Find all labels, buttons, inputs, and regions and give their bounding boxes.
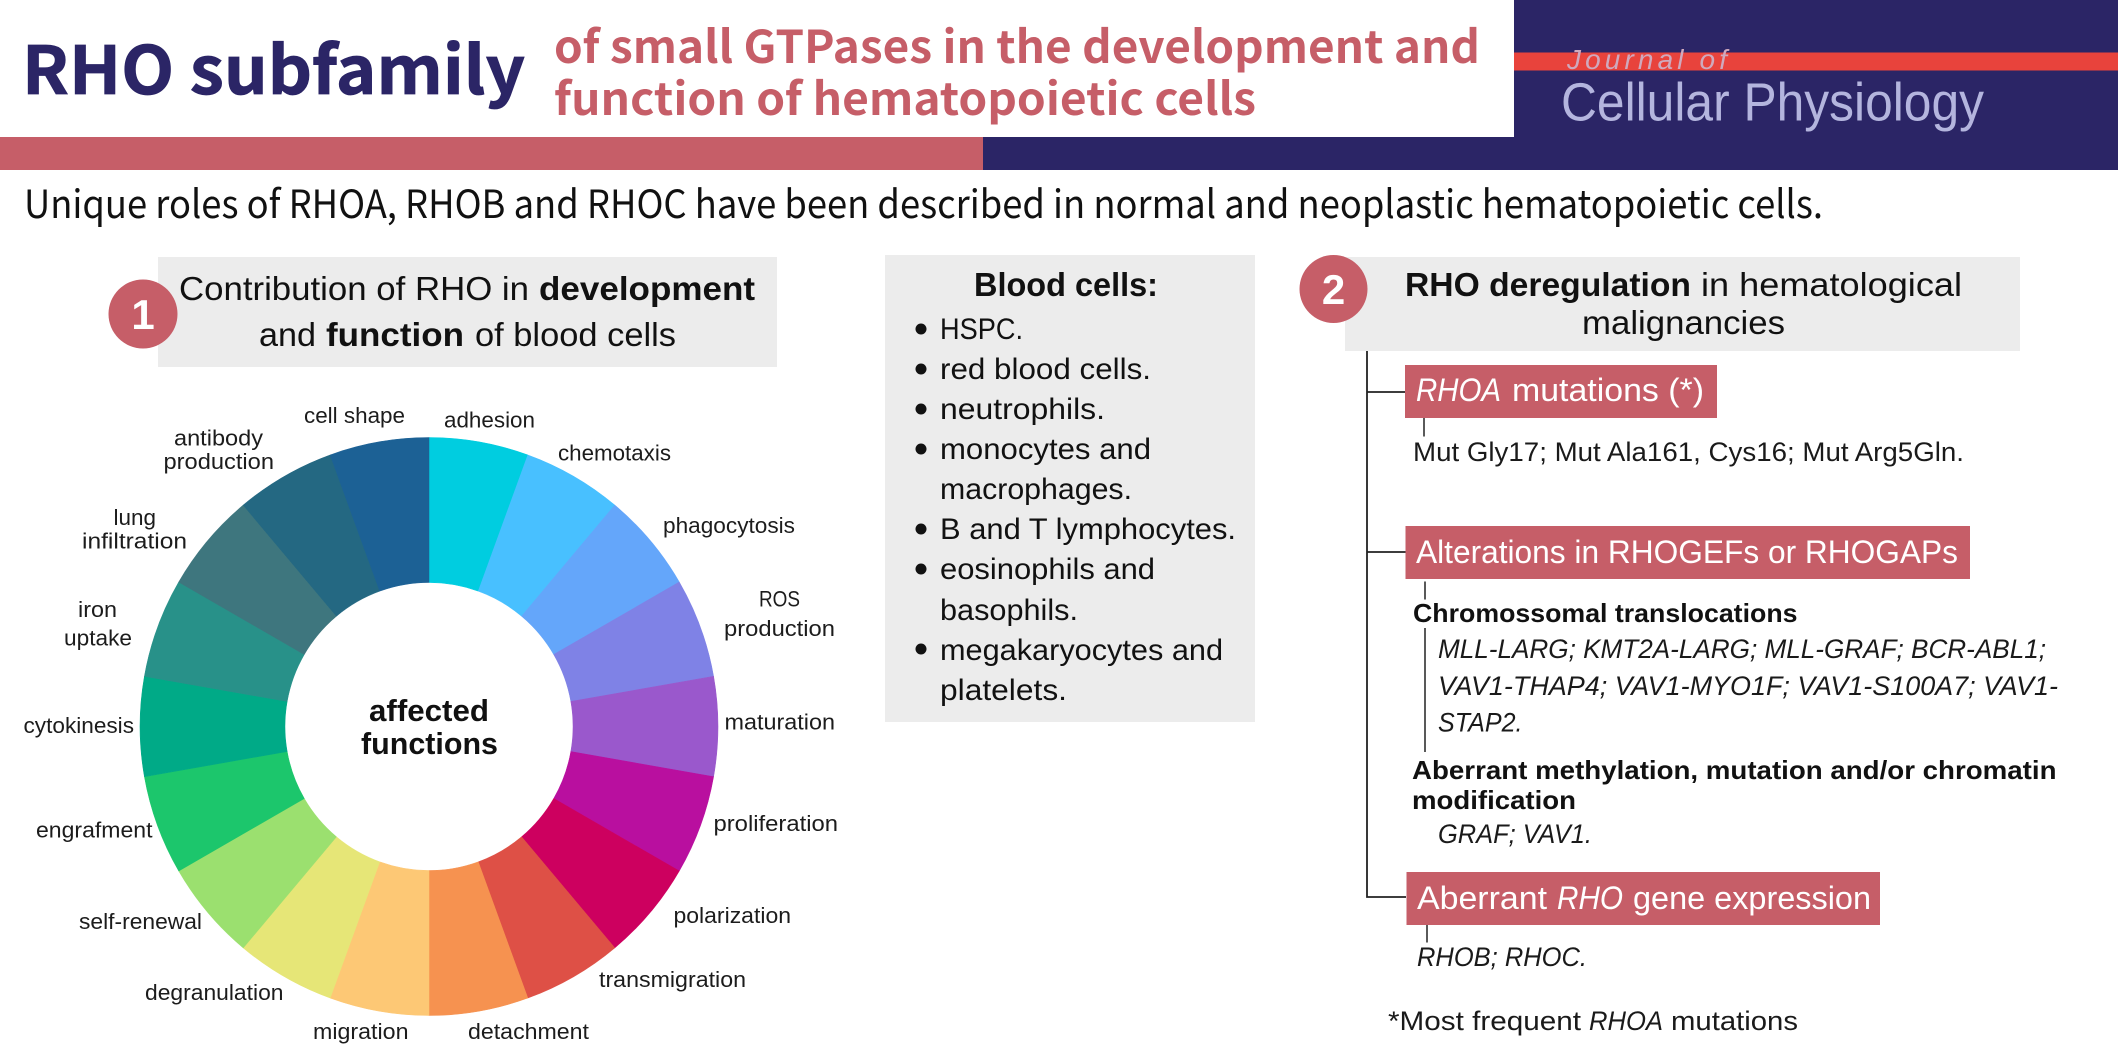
wedge: cell shape bbox=[330, 421, 476, 599]
label: transmigration: transmigration bbox=[599, 967, 746, 992]
chromosomal translocations: STAP2. bbox=[1438, 708, 1522, 738]
label: lung infiltration: lung bbox=[114, 505, 156, 530]
label: lung infiltration bbox=[82, 505, 187, 554]
chromosomal translocations bbox=[1413, 598, 2058, 738]
center label: affected bbox=[369, 693, 489, 728]
label: chemotaxis: chemotaxis bbox=[558, 440, 671, 466]
wedge: adhesion bbox=[429, 438, 528, 591]
header band bbox=[0, 0, 2118, 170]
panel 2 heading text: in hematological bbox=[1701, 266, 1962, 303]
aberrant methylation: GRAF; VAV1. bbox=[1438, 819, 1592, 849]
badge 1: 1 bbox=[131, 291, 155, 338]
panel 1 heading text: Contribution of RHO in bbox=[179, 270, 529, 307]
label: proliferation: proliferation bbox=[714, 811, 838, 836]
subtitle bbox=[554, 11, 1480, 128]
wedge: self-renewal bbox=[168, 767, 342, 948]
blood cells list: monocytes and bbox=[940, 433, 1151, 466]
footnote: RHOA bbox=[1589, 1006, 1663, 1036]
label: adhesion: adhesion bbox=[444, 408, 535, 432]
footnote: mutations bbox=[1671, 1006, 1798, 1036]
label: maturation: maturation bbox=[724, 710, 835, 734]
subtitle: function of hematopoietic cells bbox=[554, 63, 1256, 128]
label: detachment: detachment bbox=[468, 1019, 589, 1044]
wedge: chemotaxis bbox=[475, 455, 621, 633]
label: polarization: polarization bbox=[674, 903, 791, 928]
wedge: migration bbox=[330, 862, 429, 1016]
center label: functions bbox=[361, 726, 498, 761]
chromosomal translocations: MLL-LARG; KMT2A-LARG; MLL-GRAF; BCR-ABL1; bbox=[1438, 634, 2046, 664]
journal logo: Cellular Physiology bbox=[1561, 72, 1984, 132]
label: lung infiltration: infiltration bbox=[82, 528, 187, 554]
label: antibody production: antibody bbox=[174, 426, 263, 450]
section: RHOA mutations: Mut Gly17; Mut Ala161, Cys16; Mut Arg5Gln. bbox=[1413, 437, 1964, 467]
label: ROS production: ROS bbox=[759, 586, 800, 612]
section: RHOA mutations: mutations (*) bbox=[1512, 372, 1704, 408]
wedge: transmigration bbox=[440, 830, 615, 1011]
wedge: detachment bbox=[382, 854, 528, 1032]
label: ROS production bbox=[724, 586, 835, 641]
wedge: ROS production bbox=[546, 582, 729, 744]
blood cells list: neutrophils. bbox=[940, 393, 1105, 426]
label: phagocytosis: phagocytosis bbox=[663, 513, 795, 538]
wedge: polarization bbox=[497, 794, 679, 957]
panel 1 heading text: of blood cells bbox=[475, 316, 676, 353]
panel 1 heading text: function bbox=[326, 316, 464, 353]
wedge: cytokinesis bbox=[127, 653, 296, 777]
section: aberrant RHO gene expression: RHO bbox=[1557, 880, 1623, 916]
donut chart: affected functions bbox=[127, 421, 731, 1032]
section: alterations in RHOGEFs or RHOGAPs bbox=[1406, 526, 2058, 849]
chromosomal translocations: VAV1-THAP4; VAV1-MYO1F; VAV1-S100A7; VAV1- bbox=[1438, 671, 2058, 701]
wedge: phagocytosis bbox=[516, 505, 690, 686]
label: degranulation: degranulation bbox=[145, 980, 284, 1005]
journal logo: Journal of bbox=[1566, 44, 1730, 75]
section: alterations in RHOGEFs or RHOGAPs: Alterations in RHOGEFs or RHOGAPs bbox=[1416, 534, 1958, 570]
blood cells list: red blood cells. bbox=[940, 353, 1151, 386]
tagline: Unique roles of RHOA, RHOB and RHOC have been described in normal and neoplastic hematopoietic cells. bbox=[24, 174, 1823, 230]
journal logo bbox=[1514, 0, 2118, 137]
wedge: lung infiltration bbox=[179, 496, 361, 659]
label: ROS production: production bbox=[724, 616, 835, 641]
chromosomal translocations: Chromossomal translocations bbox=[1413, 598, 1798, 628]
blood cells list: eosinophils and bbox=[940, 553, 1155, 586]
wedge: engrafment bbox=[129, 709, 312, 871]
label: iron uptake bbox=[64, 597, 132, 650]
badge 2: 2 bbox=[1322, 266, 1345, 313]
aberrant methylation bbox=[1412, 755, 2056, 849]
label: cytokinesis: cytokinesis bbox=[24, 713, 134, 738]
section: RHOA mutations bbox=[1405, 365, 1964, 467]
blood cells list: basophils. bbox=[940, 594, 1078, 627]
section: RHOA mutations: RHOA bbox=[1416, 372, 1501, 408]
label: engrafment: engrafment bbox=[36, 818, 152, 842]
wheel labels bbox=[24, 403, 838, 1044]
panel 1 heading text bbox=[179, 270, 755, 353]
section: aberrant RHO gene expression: gene expression bbox=[1633, 880, 1871, 916]
footnote bbox=[1388, 1006, 1798, 1036]
panel 2 heading text: malignancies bbox=[1582, 304, 1785, 341]
panel 2 heading text: RHO deregulation bbox=[1405, 266, 1691, 303]
blood cells list: macrophages. bbox=[940, 473, 1132, 506]
wedge: antibody production bbox=[243, 442, 418, 623]
wedge: proliferation bbox=[545, 750, 714, 874]
center label bbox=[361, 693, 498, 761]
section: aberrant RHO gene expression: RHOB; RHOC. bbox=[1417, 942, 1587, 972]
label: cell shape: cell shape bbox=[304, 403, 405, 428]
tree connector bbox=[1367, 351, 1406, 897]
blood cells list: platelets. bbox=[940, 674, 1067, 707]
wedge: maturation bbox=[562, 676, 731, 800]
blood cells list: B and T lymphocytes. bbox=[940, 513, 1236, 546]
blood cells list bbox=[916, 313, 1236, 707]
aberrant methylation: modification bbox=[1412, 785, 1576, 815]
label: self-renewal: self-renewal bbox=[79, 909, 202, 934]
panel 1 heading text: development bbox=[539, 270, 755, 307]
section: aberrant RHO gene expression: Aberrant bbox=[1417, 880, 1547, 916]
aberrant methylation: Aberrant methylation, mutation and/or chromatin bbox=[1412, 755, 2056, 785]
blood cells list: HSPC. bbox=[940, 313, 1023, 346]
panel 2 heading text bbox=[1405, 266, 1962, 341]
panel: blood cells bbox=[885, 255, 1255, 722]
label: antibody production bbox=[164, 426, 274, 474]
title: RHO subfamily bbox=[22, 18, 525, 114]
blood cells list: megakaryocytes and bbox=[940, 634, 1223, 667]
badge 1 bbox=[108, 280, 178, 348]
footnote: *Most frequent bbox=[1388, 1006, 1582, 1036]
label: iron uptake: iron bbox=[78, 597, 117, 622]
blood cells heading: Blood cells: bbox=[974, 266, 1158, 303]
section: aberrant RHO gene expression bbox=[1406, 872, 1880, 972]
subtitle: of small GTPases in the development and bbox=[554, 11, 1480, 76]
wedge: degranulation bbox=[237, 820, 383, 998]
label: iron uptake: uptake bbox=[64, 626, 132, 650]
label: migration: migration bbox=[313, 1019, 408, 1044]
panel 1 heading text: and bbox=[259, 316, 316, 353]
label: antibody production: production bbox=[164, 449, 274, 474]
badge 2 bbox=[1300, 255, 1368, 323]
wedge: iron uptake bbox=[144, 579, 313, 703]
panel 2 heading bbox=[1300, 255, 2020, 351]
panel 1 heading bbox=[108, 257, 777, 367]
